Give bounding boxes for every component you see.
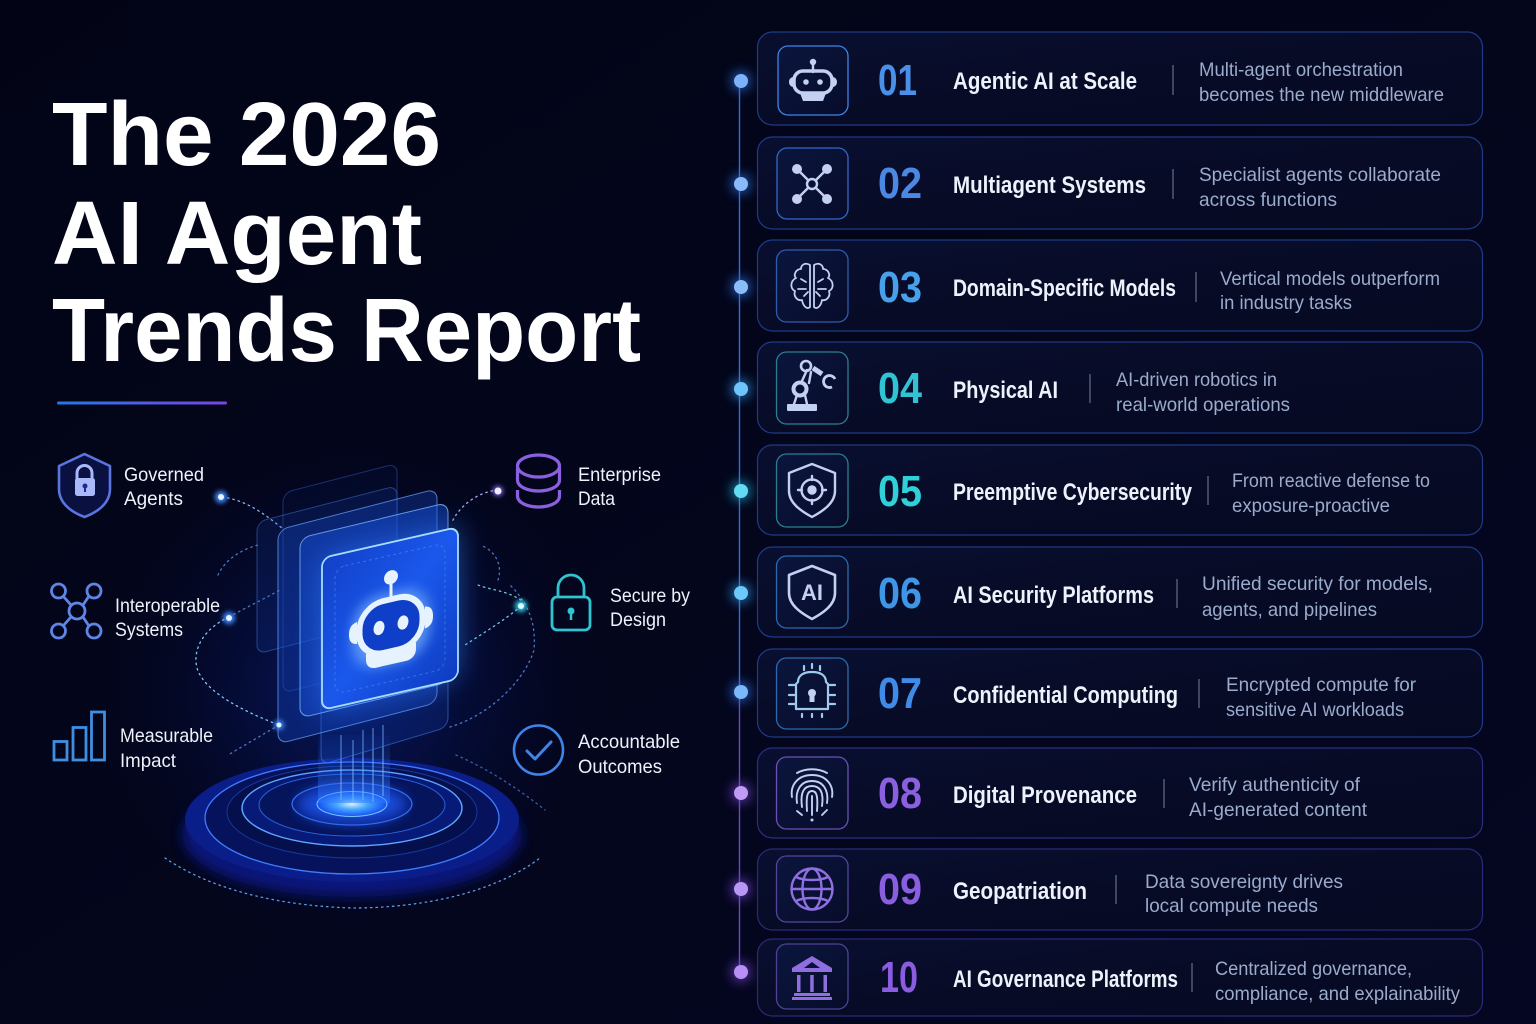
feature: Secure by Design: Design (610, 609, 666, 631)
feature: Measurable Impact (54, 712, 213, 772)
central illustration: holographic agent (165, 463, 545, 908)
connector nodes (215, 486, 527, 730)
card 07: sensitive AI workloads (1226, 699, 1404, 721)
card 08: AI-generated content (1189, 799, 1368, 821)
card 01: becomes the new middleware (1199, 84, 1444, 106)
icon: brain (791, 264, 833, 308)
feature: Enterprise Data: Data (578, 488, 615, 510)
card 08: Verify authenticity of (1189, 774, 1361, 796)
feature: Governed Agents: Governed (124, 464, 204, 486)
icon: robot arm (787, 361, 835, 411)
glass layer: lower (321, 562, 448, 765)
card 09: local compute needs (1145, 895, 1318, 917)
card 02: 02 (878, 159, 922, 208)
card 08: 08 (878, 769, 922, 818)
card 05 (758, 445, 1482, 535)
glass layer: third (278, 489, 437, 744)
card 05: exposure-proactive (1232, 495, 1390, 517)
icon: network nodes (792, 164, 832, 204)
card 01: Agentic AI at Scale (953, 68, 1137, 95)
icon: check circle (514, 726, 563, 774)
icon: globe (792, 868, 832, 910)
icon: robot (789, 59, 837, 101)
card 08: Digital Provenance (953, 782, 1137, 809)
feature: Accountable Outcomes: Outcomes (578, 756, 662, 778)
card 04: 04 (878, 364, 922, 413)
icon: bars (54, 712, 104, 760)
card 01 (758, 32, 1482, 125)
icon: AI shield (789, 566, 835, 619)
title: AI Agent (52, 184, 422, 284)
card 03: 03 (878, 263, 922, 312)
card 07 (758, 649, 1482, 737)
title: The 2026 (52, 85, 441, 185)
icon: network (52, 584, 101, 638)
icon: shield target (789, 464, 835, 517)
icon: secure chip (789, 664, 835, 717)
timeline (732, 72, 750, 981)
feature: Measurable Impact: Impact (120, 750, 177, 772)
card 10: Centralized governance, (1215, 958, 1412, 980)
card 06: 06 (878, 569, 922, 618)
card 09 (758, 849, 1482, 930)
icon: padlock (552, 575, 590, 630)
card 05: From reactive defense to (1232, 470, 1430, 492)
card 03 (758, 240, 1482, 331)
card 03: Domain-Specific Models (953, 275, 1176, 302)
card 10: compliance, and explainability (1215, 983, 1460, 1005)
dotted orbit lines (165, 490, 545, 908)
feature: Accountable Outcomes: Accountable (578, 731, 680, 753)
card 10: AI Governance Platforms (953, 966, 1178, 993)
card 02: Multiagent Systems (953, 172, 1146, 199)
feature: Governed Agents (59, 454, 204, 517)
feature: Enterprise Data: Enterprise (578, 464, 661, 486)
card 01: 01 (878, 56, 917, 105)
light beam (318, 725, 390, 803)
front glass panel with robot (322, 527, 458, 710)
card 01: Multi-agent orchestration (1199, 59, 1403, 81)
icon: AI shield: AI (801, 580, 823, 605)
card 07: Confidential Computing (953, 682, 1178, 709)
card 04 (758, 342, 1482, 433)
feature: Interoperable Systems: Systems (115, 619, 183, 641)
card 04: AI-driven robotics in (1116, 369, 1277, 391)
card 02: Specialist agents collaborate (1199, 164, 1441, 186)
card 06: AI Security Platforms (953, 582, 1154, 609)
robot glow (352, 583, 430, 673)
card 09: 09 (878, 865, 922, 914)
card 05: 05 (878, 467, 922, 516)
icon: database (518, 455, 560, 507)
card 06: Unified security for models, (1202, 573, 1433, 595)
title: Trends Report (52, 281, 641, 381)
feature: Governed Agents: Agents (124, 488, 183, 510)
icon: fingerprint (792, 769, 832, 822)
icon: shield with lock (59, 454, 110, 517)
feature: Enterprise Data (518, 455, 661, 510)
card 10: 10 (880, 953, 918, 1002)
card 09: Geopatriation (953, 878, 1087, 905)
card 06 (758, 547, 1482, 637)
front panel glow (322, 527, 458, 710)
robot icon (349, 561, 433, 674)
title underline (57, 402, 227, 404)
feature: Measurable Impact: Measurable (120, 725, 213, 747)
glass layer: back top (283, 463, 397, 693)
icon: institution (792, 956, 832, 1000)
title (52, 85, 641, 381)
card 07: 07 (878, 669, 922, 718)
card 07: Encrypted compute for (1226, 674, 1416, 696)
card 04: real-world operations (1116, 394, 1290, 416)
card 03: Vertical models outperform (1220, 268, 1440, 290)
glass layer: back left (257, 486, 397, 654)
card 10 (758, 939, 1482, 1016)
glass layer: second (300, 502, 448, 718)
card 04: Physical AI (953, 377, 1058, 404)
card 08 (758, 748, 1482, 838)
card 02: across functions (1199, 189, 1337, 211)
feature: Interoperable Systems (52, 584, 220, 641)
feature: Secure by Design: Secure by (610, 585, 690, 607)
feature: Interoperable Systems: Interoperable (115, 595, 220, 617)
card 05: Preemptive Cybersecurity (953, 479, 1193, 506)
card 06: agents, and pipelines (1202, 599, 1377, 621)
base platform rings (182, 758, 522, 897)
card 03: in industry tasks (1220, 292, 1352, 314)
card 09: Data sovereignty drives (1145, 871, 1343, 893)
feature: Secure by Design (552, 575, 690, 631)
feature: Accountable Outcomes (514, 726, 680, 778)
card 02 (758, 137, 1482, 229)
